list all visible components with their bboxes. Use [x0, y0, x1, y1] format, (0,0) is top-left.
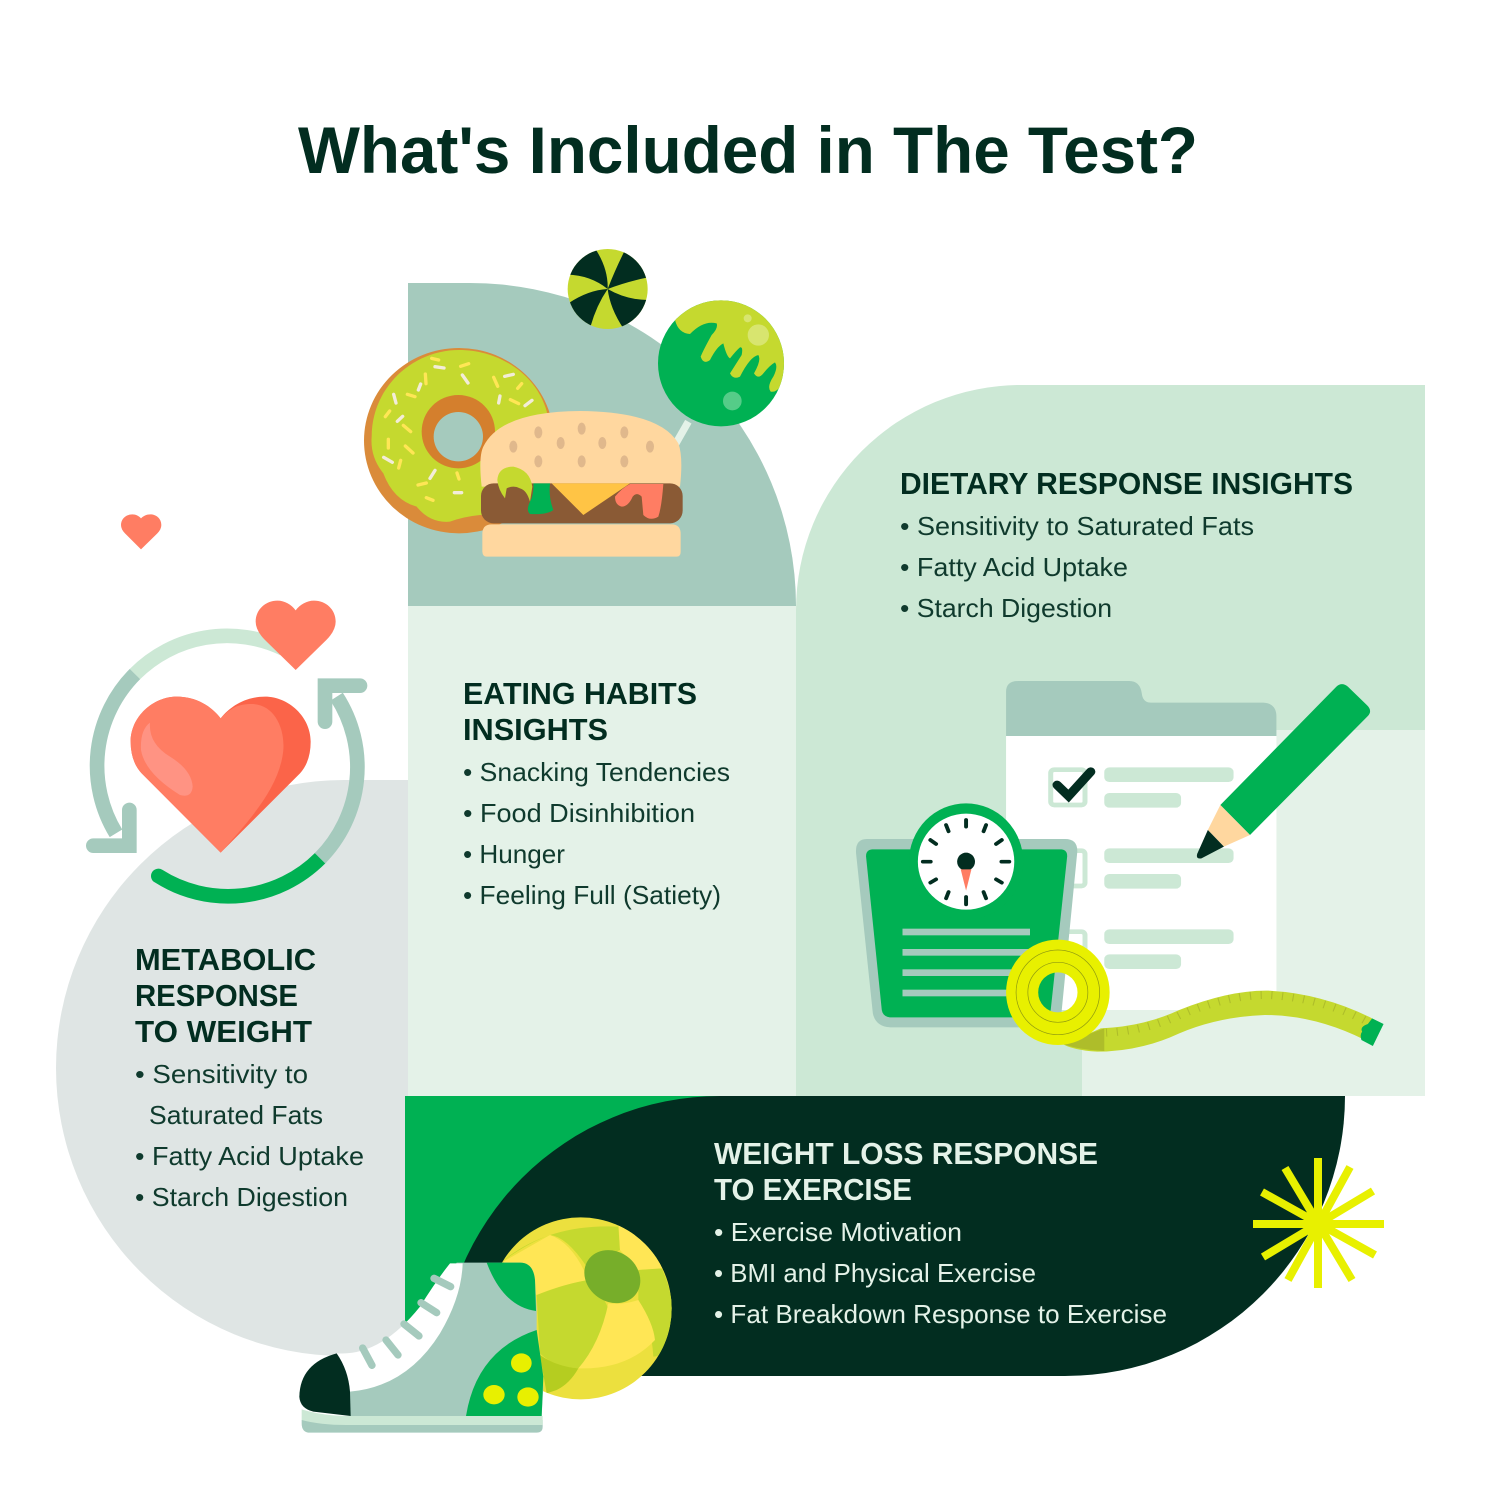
heading: metabolic response to weight: RESPONSE [135, 978, 298, 1013]
illustration: clipboard, scale, pencil and tape [856, 681, 1384, 1052]
list: eating habits items: • Feeling Full (Satiety) [463, 880, 721, 910]
panel: eating habits insights [408, 283, 796, 1096]
list: eating habits items: • Hunger [463, 839, 565, 869]
heading: weight loss response to exercise [714, 1136, 1098, 1207]
icon: checklist folder [1006, 681, 1276, 1010]
list: metabolic items: • Fatty Acid Uptake [135, 1141, 364, 1171]
icon: pencil [1197, 684, 1370, 858]
list: metabolic items: • Starch Digestion [135, 1182, 348, 1212]
heading: metabolic response to weight [135, 942, 316, 1049]
panel: metabolic response to weight [56, 780, 408, 1356]
panel: weight loss response to exercise [405, 1096, 1345, 1376]
icon: medium heart [256, 601, 336, 670]
list: eating habits items: • Snacking Tendencies [463, 757, 730, 787]
list: metabolic items: • Sensitivity to [135, 1059, 308, 1089]
icon: large heart [131, 697, 311, 853]
illustration: beach ball and sneaker [299, 1217, 673, 1433]
panel: dietary response insights [796, 385, 1425, 1096]
heading: metabolic response to weight: TO WEIGHT [135, 1014, 312, 1049]
heading: eating habits insights [463, 676, 697, 747]
icon: starburst [1253, 1158, 1384, 1288]
title: What's Included in The Test? [298, 113, 1198, 187]
list: dietary items: • Fatty Acid Uptake [900, 552, 1128, 582]
list: metabolic items: Saturated Fats [149, 1100, 323, 1130]
icon: weighing scale [856, 803, 1077, 1027]
infographic [56, 125, 1425, 1433]
list: eating habits items: • Food Disinhibition [463, 798, 695, 828]
icon: swirl candy [567, 248, 650, 329]
icon: donut [364, 348, 554, 533]
illustration: donut, burger and candies [364, 248, 787, 557]
heading: metabolic response to weight: METABOLIC [135, 942, 316, 977]
icon: measuring tape [1006, 940, 1384, 1052]
heading: eating habits insights: INSIGHTS [463, 712, 608, 747]
heading: weight loss response to exercise: WEIGHT LOSS RESPONSE [714, 1136, 1098, 1171]
heading: eating habits insights: EATING HABITS [463, 676, 697, 711]
list: metabolic items [135, 1059, 364, 1212]
icon: hearts and cycle arrows [93, 514, 360, 896]
icon: sneaker [299, 1263, 543, 1433]
list: dietary items [900, 511, 1254, 623]
cycle ring [93, 636, 360, 896]
list: dietary items: • Sensitivity to Saturated Fats [900, 511, 1254, 541]
list: exercise items: • BMI and Physical Exercise [714, 1258, 1036, 1288]
heading: dietary response insights: DIETARY RESPONSE INSIGHTS [900, 466, 1353, 501]
icon: burger [480, 411, 683, 557]
icon: small heart [121, 514, 161, 549]
list: exercise items: • Exercise Motivation [714, 1217, 962, 1247]
icon: lollipop [658, 297, 787, 445]
icon: beach ball [490, 1217, 673, 1399]
list: eating habits items [463, 757, 730, 910]
list: exercise items: • Fat Breakdown Response to Exercise [714, 1299, 1167, 1329]
heading: weight loss response to exercise: TO EXERCISE [714, 1172, 912, 1207]
list: exercise items [714, 1217, 1167, 1329]
list: dietary items: • Starch Digestion [900, 593, 1112, 623]
